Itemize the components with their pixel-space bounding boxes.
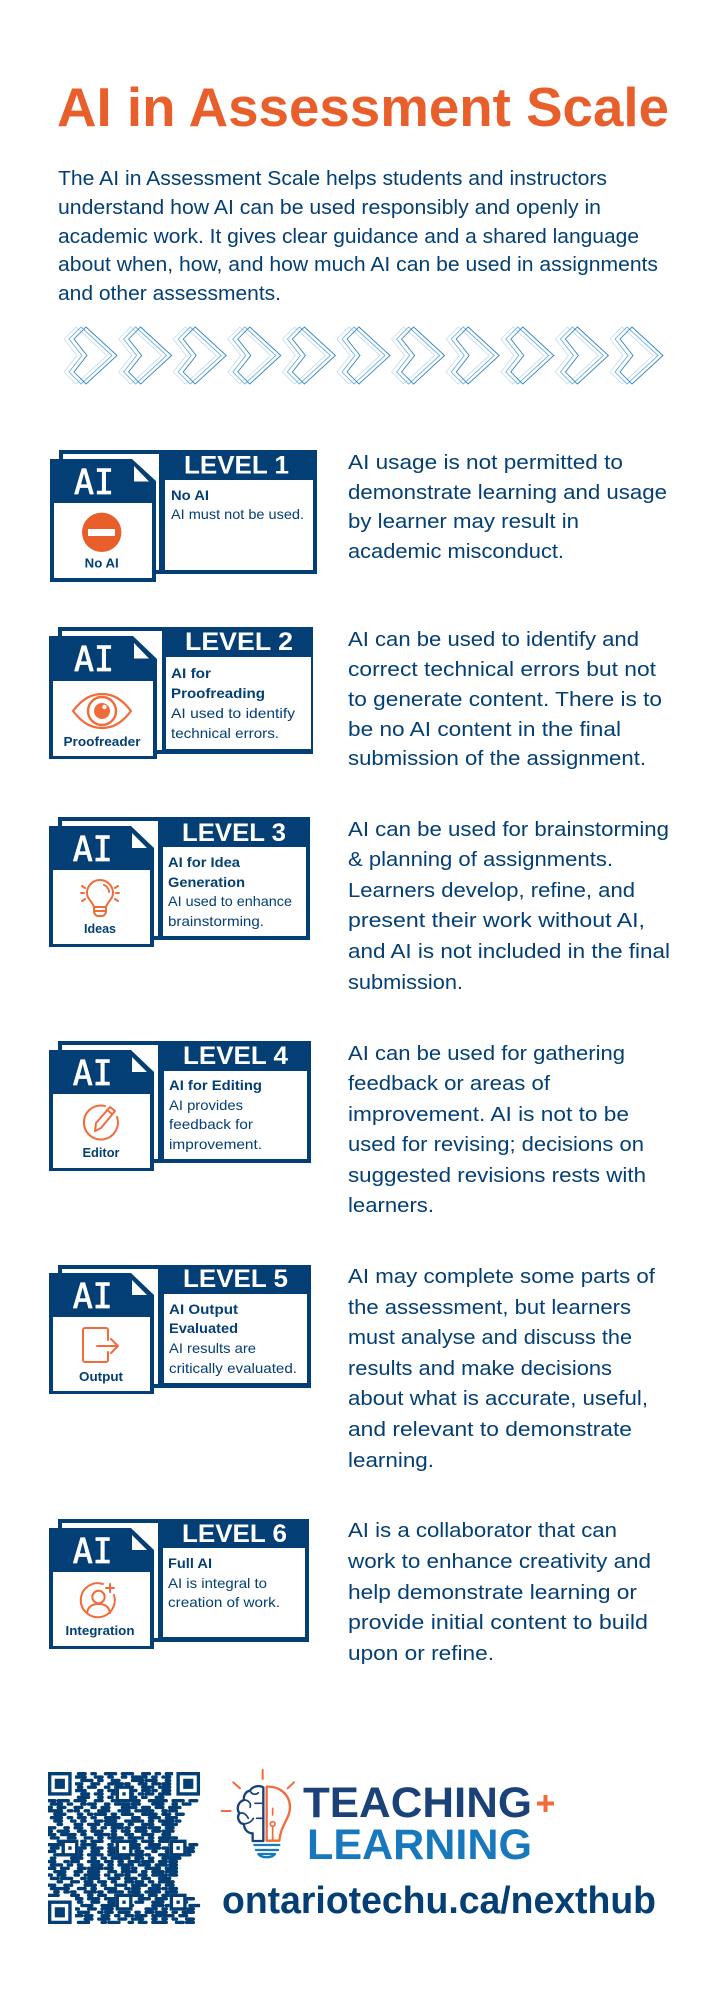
document icon: AI [74, 640, 114, 680]
document icon: AI [73, 1532, 113, 1572]
document icon: AI [74, 463, 114, 503]
label: Output [79, 1370, 124, 1384]
description panel: Generation [168, 874, 245, 890]
level 1 card [50, 450, 317, 582]
description panel: AI used to identify [171, 705, 295, 721]
level 5 description: about what is accurate, useful, [348, 1387, 648, 1410]
description panel: AI provides [169, 1097, 243, 1113]
description panel: AI for Editing [169, 1077, 262, 1093]
level heading: LEVEL 2 [185, 628, 293, 656]
icon: no entry [82, 513, 121, 552]
QR code [48, 1772, 200, 1924]
document icon [50, 459, 156, 582]
description panel: AI for [171, 665, 212, 681]
level 1 description: by learner may result in [348, 510, 579, 533]
description panel: Proofreading [171, 685, 265, 701]
level 2 card [49, 627, 313, 759]
level 6 description: upon or refine. [348, 1642, 494, 1665]
description panel: AI results are [169, 1340, 256, 1356]
back sheet [58, 1265, 311, 1388]
level 5 description: the assessment, but learners [348, 1296, 631, 1319]
chevron divider [64, 327, 663, 384]
back sheet opening [62, 1523, 158, 1638]
level 5 description: and relevant to demonstrate [348, 1418, 632, 1441]
back sheet opening [62, 1045, 158, 1159]
description panel: creation of work. [168, 1594, 280, 1610]
back sheet [58, 1519, 309, 1642]
icon: output arrow [83, 1328, 118, 1362]
intro text: understand how AI can be used responsibly and openly in [58, 196, 601, 219]
label: No AI [85, 557, 119, 571]
document icon: AI [73, 1054, 113, 1094]
back sheet [58, 1041, 311, 1163]
document icon [49, 826, 154, 947]
logo: brain light bulb [222, 1770, 294, 1857]
intro text: academic work. It gives clear guidance and a shared language [58, 225, 639, 248]
logo plus [537, 1795, 554, 1812]
title: AI in Assessment Scale [57, 76, 669, 138]
description panel: No AI [171, 487, 209, 503]
document icon [49, 1273, 154, 1394]
level heading: LEVEL 4 [183, 1042, 288, 1070]
level 3 description: and AI is not included in the final [348, 940, 670, 963]
level 5 description: must analyse and discuss the [348, 1326, 632, 1349]
level 3 card [49, 817, 310, 947]
level 3 description: submission. [348, 971, 463, 994]
level 4 description: used for revising; decisions on [348, 1133, 644, 1156]
level 2 description: correct technical errors but not [348, 658, 656, 681]
level 2 description: AI can be used to identify and [348, 628, 639, 651]
description panel: AI used to enhance [168, 893, 292, 909]
logo text: teaching: TEACHING [303, 1779, 532, 1827]
level 1 description [348, 451, 667, 563]
level 1 description: academic misconduct. [348, 540, 564, 563]
description panel: technical errors. [171, 725, 279, 741]
description panel: AI is integral to [168, 1575, 267, 1591]
level 6 description: provide initial content to build [348, 1611, 648, 1634]
level 5 description [348, 1265, 655, 1472]
description panel [163, 1548, 305, 1637]
description panel [165, 480, 313, 570]
level heading: LEVEL 3 [182, 819, 286, 847]
level 3 description: present their work without AI, [348, 909, 645, 932]
icon: eye [73, 694, 131, 728]
icon: person with plus [81, 1583, 115, 1617]
description panel [164, 1294, 307, 1383]
description panel: Full AI [168, 1555, 212, 1571]
level 4 description: feedback or areas of [348, 1072, 550, 1095]
level 1 description: AI usage is not permitted to [348, 451, 623, 474]
description panel: improvement. [169, 1136, 262, 1152]
level 5 description: learning. [348, 1449, 434, 1472]
level 3 description: Learners develop, refine, and [348, 879, 635, 902]
icon: light bulb [81, 880, 119, 916]
level 6 description: work to enhance creativity and [347, 1550, 651, 1573]
description panel [166, 657, 311, 749]
level 6 description: help demonstrate learning or [348, 1581, 637, 1604]
level 2 description: be no AI content in the final [348, 718, 621, 741]
level 3 description [348, 818, 670, 994]
description panel: critically evaluated. [169, 1360, 297, 1376]
label: Ideas [84, 922, 116, 936]
document icon [49, 636, 157, 759]
intro text: about when, how, and how much AI can be used in assignments [58, 253, 658, 276]
description panel: feedback for [169, 1116, 253, 1132]
description panel [163, 847, 306, 936]
description panel: AI must not be used. [171, 506, 304, 522]
level 1 description: demonstrate learning and usage [348, 481, 667, 504]
level 6 description: AI is a collaborator that can [348, 1519, 617, 1542]
document icon: AI [73, 1277, 113, 1317]
level 5 description: results and make decisions [348, 1357, 612, 1380]
icon: pencil in circle [84, 1106, 118, 1140]
level 5 card [49, 1265, 311, 1394]
back sheet [59, 450, 317, 574]
level heading: LEVEL 5 [183, 1265, 288, 1293]
level 4 card [49, 1041, 311, 1171]
back sheet opening [63, 454, 159, 570]
level 2 description: submission of the assignment. [348, 747, 646, 770]
back sheet opening [62, 821, 158, 936]
level 4 description [348, 1042, 646, 1217]
intro text: and other assessments. [58, 282, 281, 305]
level heading: LEVEL 1 [184, 452, 289, 480]
description panel: brainstorming. [168, 913, 264, 929]
level 6 description [347, 1519, 651, 1665]
document icon [49, 1050, 154, 1171]
label: Proofreader [64, 735, 141, 749]
description panel: Evaluated [169, 1320, 238, 1336]
level 4 description: AI can be used for gathering [348, 1042, 625, 1065]
level 4 description: suggested revisions rests with [348, 1164, 646, 1187]
level 6 card [49, 1519, 309, 1649]
level 3 description: AI can be used for brainstorming [348, 818, 669, 841]
level 3 description: & planning of assignments. [348, 848, 613, 871]
level heading: LEVEL 6 [182, 1520, 287, 1548]
back sheet opening [62, 1269, 158, 1384]
intro text: The AI in Assessment Scale helps students and instructors [58, 167, 607, 190]
description panel [164, 1071, 307, 1159]
level 4 description: learners. [348, 1194, 434, 1217]
website url: ontariotechu.ca/nexthub [222, 1880, 656, 1922]
level 2 description: to generate content. There is to [348, 688, 662, 711]
intro text [58, 167, 658, 305]
back sheet opening [62, 631, 162, 750]
label: Editor [82, 1146, 120, 1160]
back sheet [58, 817, 310, 940]
description panel: AI Output [169, 1301, 238, 1317]
document icon [49, 1528, 154, 1649]
back sheet [58, 627, 313, 754]
level 2 description [348, 628, 662, 770]
label: Integration [66, 1624, 134, 1638]
logo text: learning: LEARNING [307, 1821, 532, 1869]
level 4 description: improvement. AI is not to be [348, 1103, 629, 1126]
level 5 description: AI may complete some parts of [348, 1265, 655, 1288]
document icon: AI [73, 830, 113, 870]
description panel: AI for Idea [168, 854, 240, 870]
